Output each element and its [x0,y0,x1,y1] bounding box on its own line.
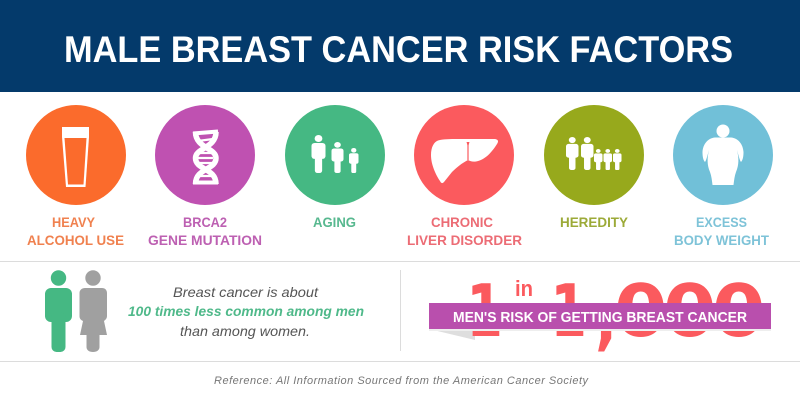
risk factor: excess body weight [673,105,773,248]
title: MALE BREAST CANCER RISK FACTORS [64,29,733,70]
statistic text: Breast cancer is about [173,284,319,300]
label: heredity: HEREDITY [560,214,629,230]
section divider top [0,261,800,262]
label: heavy alcohol use: ALCOHOL USE [27,232,124,248]
icon: three figures of decreasing size [312,135,358,173]
icon: man figure [45,270,72,352]
risk factor: heredity [544,105,644,230]
big number: 1 in 1,000: in [515,276,533,301]
label: heavy alcohol use: HEAVY [52,214,96,230]
label: aging: AGING [313,214,356,230]
statistic text: 100 times less common among men [128,303,364,319]
label: chronic liver disorder: LIVER DISORDER [407,232,522,248]
column divider [400,270,401,351]
ribbon banner: MEN'S RISK OF GETTING BREAST CANCER [453,309,747,326]
icon: family of five figures [566,137,622,170]
icon: woman figure [80,270,107,352]
icon: liver [431,139,498,183]
risk factor: BRCA2 gene mutation [148,105,262,248]
label: excess body weight: BODY WEIGHT [674,232,769,248]
big number: 1 in 1,000: , [595,275,617,359]
ribbon banner [429,303,771,331]
reference footnote: Reference: All Information Sourced from the American Cancer Society [214,375,590,387]
big number: 1 in 1,000: 0 [614,269,667,353]
banner shadow [429,329,475,340]
icon: DNA helix [193,132,218,184]
icon: overweight figure [702,124,744,185]
big number: 1 in 1,000: 0 [712,269,765,353]
header banner [0,0,800,92]
risk factor: chronic liver disorder [407,105,522,248]
label: BRCA2 gene mutation: GENE MUTATION [148,232,262,248]
big number: 1 in 1,000: 1 [551,270,587,353]
section divider bottom [0,361,800,362]
label: BRCA2 gene mutation: BRCA2 [183,214,227,230]
statistic text: than among women. [180,323,310,339]
risk factor: aging [285,105,385,230]
big number: 1 in 1,000 [467,269,765,359]
label: chronic liver disorder: CHRONIC [431,214,493,230]
label: excess body weight: EXCESS [696,214,747,230]
big number: 1 in 1,000: 1 [467,270,503,353]
big number: 1 in 1,000: 0 [663,269,716,353]
icon: beer glass [62,127,89,187]
risk factor: heavy alcohol use [26,105,126,248]
